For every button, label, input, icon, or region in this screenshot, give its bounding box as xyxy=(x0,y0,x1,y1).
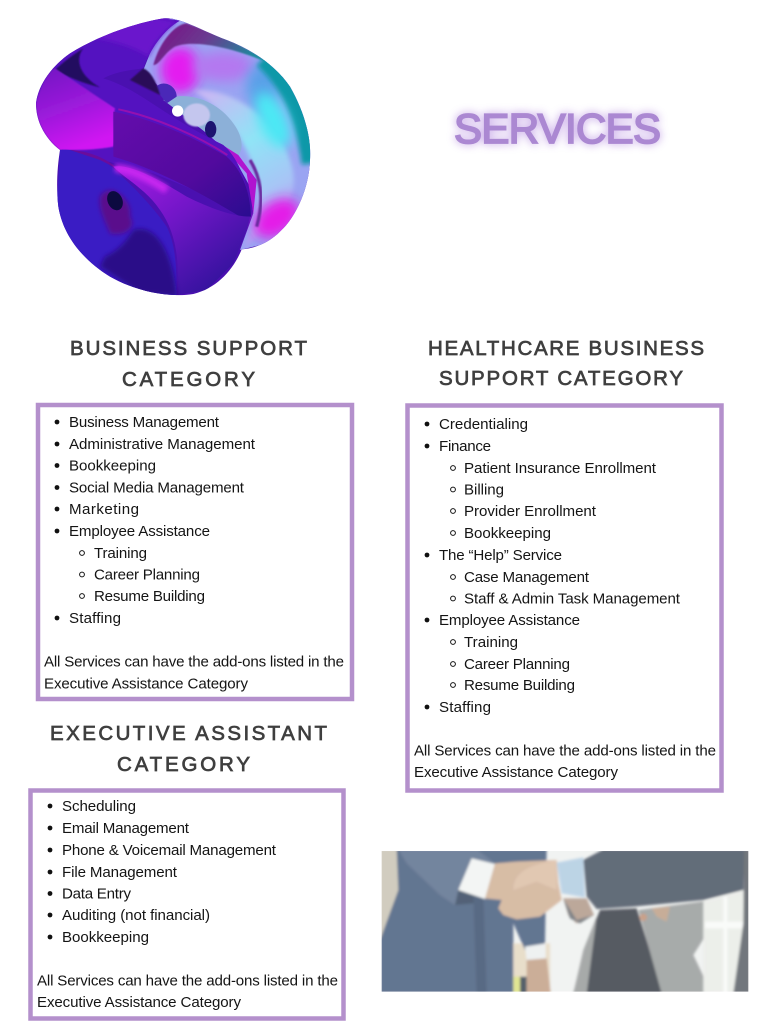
panel: business support list: Staffing xyxy=(69,610,121,627)
photo: business handshake xyxy=(380,849,750,993)
panel: healthcare business support list: Employee Assistance xyxy=(439,612,580,629)
panel: executive assistant list: Scheduling xyxy=(62,798,136,815)
panel: healthcare business support list: Staff & Admin Task Management xyxy=(464,590,681,608)
panel: healthcare business support list: Bookkeeping xyxy=(464,525,551,542)
panel: business support list: Social Media Management xyxy=(69,480,245,496)
panel: business support list: Bookkeeping xyxy=(69,458,156,474)
panel: healthcare business support list: Resume Building xyxy=(464,677,575,694)
panel: business support list: Administrative Management xyxy=(69,436,256,453)
panel: healthcare business support list: Finance xyxy=(439,438,491,455)
title: SERVICES xyxy=(454,105,661,152)
icon detail: central sphere xyxy=(130,68,261,227)
panel: healthcare business support list: Training xyxy=(464,634,518,651)
panel: executive assistant list xyxy=(30,790,344,1018)
panel: executive assistant list: Phone & Voicemail Management xyxy=(62,842,277,859)
panel: executive assistant list: Executive Assistance Category xyxy=(37,994,241,1011)
heading: executive assistant category: CATEGORY xyxy=(117,753,250,776)
panel: business support list: Employee Assistance xyxy=(69,523,210,540)
panel: healthcare business support list: The “Help” Service xyxy=(439,547,562,564)
heading: healthcare business support category: SUPPORT CATEGORY xyxy=(439,367,683,390)
panel: business support list: Training xyxy=(94,545,147,562)
panel: executive assistant list: Bookkeeping xyxy=(62,929,149,946)
panel: healthcare business support list xyxy=(408,406,722,790)
panel: executive assistant list: File Management xyxy=(62,864,178,881)
panel: healthcare business support list: Executive Assistance Category xyxy=(414,764,618,781)
panel: healthcare business support list: Credentialing xyxy=(439,416,528,433)
panel: healthcare business support list: Provider Enrollment xyxy=(464,503,597,520)
panel: business support list: Business Management xyxy=(69,414,220,431)
heading: business support category xyxy=(70,337,307,391)
heading: executive assistant category: EXECUTIVE ASSISTANT xyxy=(50,722,327,745)
panel: business support list: Career Planning xyxy=(94,566,200,584)
title: SERVICES xyxy=(454,105,661,152)
panel: business support list: Resume Building xyxy=(94,588,205,605)
panel: healthcare business support list: Staffing xyxy=(439,699,491,716)
panel: executive assistant list: Data Entry xyxy=(62,886,131,902)
icon: iridescent purple 3D blob xyxy=(30,13,317,300)
panel: business support list: Marketing xyxy=(69,501,139,518)
heading: executive assistant category xyxy=(50,722,327,776)
heading: business support category: BUSINESS SUPPORT xyxy=(70,337,307,360)
panel: executive assistant list: Email Management xyxy=(62,820,190,837)
panel: executive assistant list: Auditing (not financial) xyxy=(62,907,210,924)
heading: healthcare business support category: HEALTHCARE BUSINESS xyxy=(428,337,704,360)
panel: healthcare business support list: Patient Insurance Enrollment xyxy=(464,460,657,477)
panel: healthcare business support list: Career Planning xyxy=(464,656,570,673)
panel: healthcare business support list: Billing xyxy=(464,482,504,498)
panel: healthcare business support list: All Services can have the add-ons listed in the xyxy=(414,742,716,760)
panel: healthcare business support list: Case Management xyxy=(464,569,590,586)
panel: business support list: Executive Assistance Category xyxy=(44,676,248,692)
heading: business support category: CATEGORY xyxy=(122,368,255,391)
panel: executive assistant list: All Services can have the add-ons listed in the xyxy=(37,972,338,990)
panel: business support list xyxy=(38,405,352,699)
heading: healthcare business support category xyxy=(428,337,704,390)
panel: business support list: All Services can have the add-ons listed in the xyxy=(44,654,344,670)
